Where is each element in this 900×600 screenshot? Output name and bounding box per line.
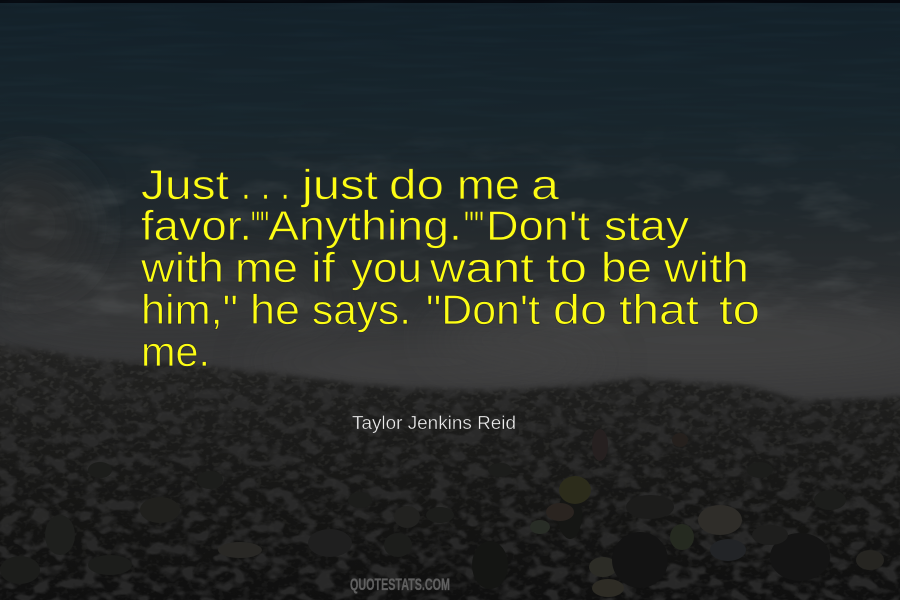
line 4: "Don't bbox=[426, 286, 540, 333]
line 4: that bbox=[619, 286, 700, 333]
line 4: he bbox=[250, 286, 300, 333]
line 1: a bbox=[531, 161, 560, 208]
line 2: "" bbox=[464, 202, 484, 249]
line 2 bbox=[141, 202, 689, 249]
line 3: if bbox=[311, 244, 336, 291]
line 4: do bbox=[553, 286, 607, 333]
pebbles bbox=[0, 429, 884, 597]
line 2: "" bbox=[251, 202, 269, 249]
line 4: says. bbox=[312, 286, 411, 333]
line 2: stay bbox=[604, 202, 689, 249]
line 3: with bbox=[140, 244, 224, 291]
line 2: favor. bbox=[141, 202, 252, 249]
line 4 bbox=[141, 286, 760, 333]
line 3: me bbox=[235, 244, 298, 291]
line 3: be bbox=[601, 244, 652, 291]
author name: Taylor Jenkins Reid bbox=[352, 412, 516, 433]
line 1: me bbox=[457, 161, 520, 208]
line 1: just bbox=[300, 161, 379, 208]
quote text bbox=[140, 161, 760, 375]
line 3 bbox=[140, 244, 749, 291]
line 3: to bbox=[546, 244, 587, 291]
line 3: want bbox=[429, 244, 535, 291]
line 1: . . . bbox=[241, 161, 290, 208]
line 1 bbox=[141, 161, 560, 208]
line 1: do bbox=[389, 161, 444, 208]
line 5: me. bbox=[141, 328, 210, 375]
line 3: with bbox=[663, 244, 749, 291]
line 4: to bbox=[719, 286, 760, 333]
line 3: you bbox=[351, 244, 422, 291]
line 2: Anything. bbox=[268, 202, 462, 249]
line 2: Don't bbox=[486, 202, 591, 249]
line 1: Just bbox=[141, 161, 230, 208]
watermark: QUOTESTATS.COM bbox=[350, 575, 450, 594]
line 4: him," bbox=[141, 286, 238, 333]
